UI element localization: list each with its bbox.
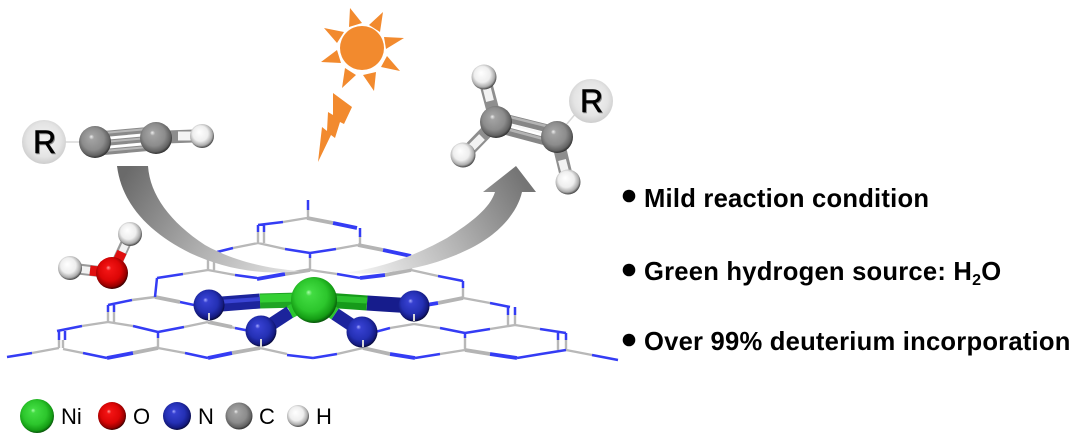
- triple bond: [104, 129, 148, 152]
- hydrogen atom: [190, 124, 214, 148]
- feature: deuterium incorporation: Over 99% deuterium incorporation: [644, 328, 1071, 356]
- curved arrow: alkene out: [343, 166, 536, 274]
- R group sphere: [22, 120, 66, 164]
- legend H sphere: [287, 405, 309, 427]
- alkyne molecule: [22, 120, 214, 164]
- oxygen atom: [96, 257, 128, 289]
- feature: green hydrogen source: O: [981, 258, 1001, 286]
- bullet 3: [623, 334, 635, 346]
- C-H bond: [166, 136, 194, 137]
- R label: R: [580, 83, 603, 119]
- icon: lightning bolt: [318, 93, 352, 162]
- O-H bonds: [70, 234, 130, 273]
- R to carbon bond: [566, 112, 577, 125]
- curved arrow: alkyne in: [117, 166, 300, 272]
- legend O label: O: [133, 404, 150, 429]
- legend N label: N: [198, 404, 214, 429]
- legend Ni sphere: [20, 399, 54, 433]
- icon: sun: [321, 8, 404, 91]
- legend C sphere: [226, 402, 252, 430]
- R label: R: [33, 124, 56, 160]
- Ni-N4 active site: [194, 277, 430, 348]
- nickel atom: [291, 277, 337, 323]
- legend N sphere: [163, 402, 191, 430]
- bullet 1: [623, 190, 635, 202]
- hydrogen atoms: [450, 64, 580, 194]
- feature: mild conditions: Mild reaction condition: [644, 185, 929, 213]
- R group sphere: [569, 79, 613, 123]
- R to carbon bond: [64, 141, 82, 143]
- legend O sphere: [98, 402, 126, 430]
- nitrogen lower bond stubs: [209, 314, 414, 348]
- feature: green hydrogen source: Green hydrogen source: H: [644, 258, 972, 286]
- feature: green hydrogen source: 2: [972, 272, 981, 289]
- legend H label: H: [316, 404, 332, 429]
- bullet 2: [623, 264, 635, 276]
- water molecule: [58, 222, 142, 289]
- atom legend: [20, 399, 332, 433]
- carbon nitride lattice: [7, 200, 618, 360]
- nitrogen atoms: [194, 290, 430, 348]
- carbon atoms: [480, 106, 573, 153]
- legend Ni label: Ni: [61, 404, 82, 429]
- carbon atoms: [79, 122, 172, 158]
- legend C label: C: [259, 404, 275, 429]
- hydrogen atoms: [58, 222, 142, 280]
- C-H bonds: [464, 77, 568, 183]
- alkene molecule: [450, 64, 613, 194]
- nitrogen stub highlights: [209, 313, 414, 347]
- double bond: [495, 114, 558, 144]
- feature list: [623, 185, 1071, 356]
- bonds: [209, 298, 414, 332]
